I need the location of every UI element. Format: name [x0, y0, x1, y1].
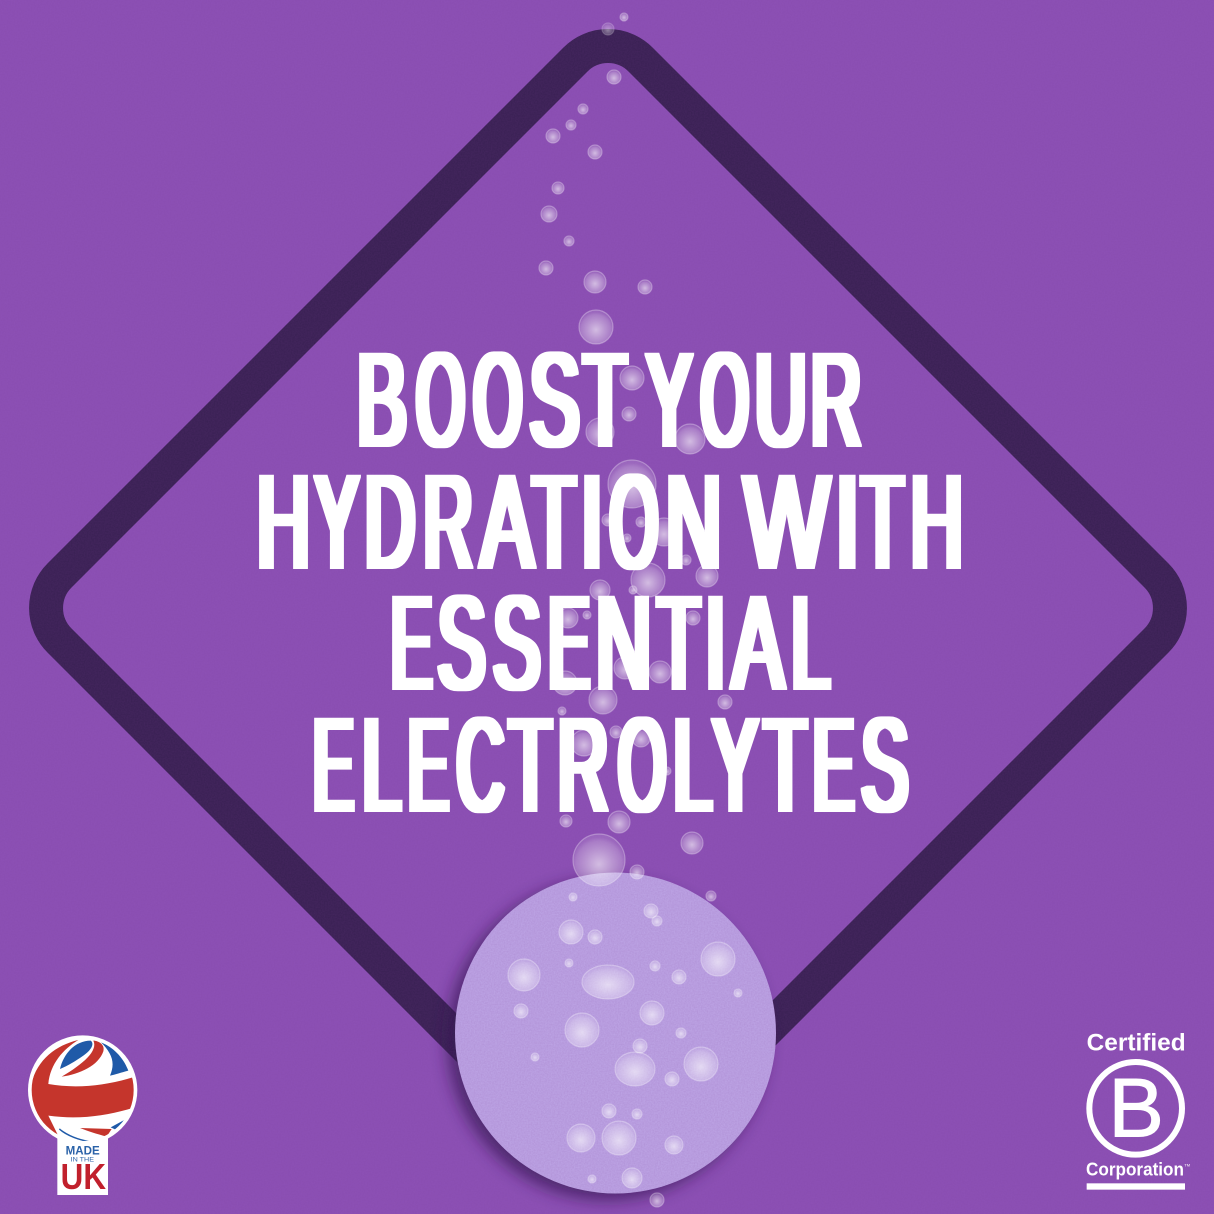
headline: S — [861, 691, 908, 840]
headline: L — [674, 691, 712, 840]
headline: S — [438, 569, 485, 718]
headline: T — [533, 448, 576, 597]
headline: T — [862, 448, 903, 597]
headline: T — [584, 326, 625, 475]
badge: certified B corporation: B — [1108, 1061, 1164, 1154]
headline: O — [618, 691, 666, 840]
badge: certified B corporation: Certified — [1087, 1030, 1186, 1057]
headline: Y — [647, 326, 692, 475]
headline: R — [811, 326, 861, 475]
headline: A — [481, 448, 533, 597]
badge: made in the UK: UK — [61, 1156, 106, 1197]
headline: U — [755, 326, 807, 475]
badge: made in the UK: MADE — [66, 1144, 100, 1158]
headline: C — [457, 691, 504, 840]
headline: O — [416, 326, 465, 475]
headline: E — [408, 691, 448, 840]
badge: certified B corporation: TM — [1184, 1163, 1190, 1168]
headline: E — [313, 691, 354, 840]
headline: S — [530, 326, 580, 475]
headline: E — [549, 569, 590, 718]
headline: D — [365, 448, 415, 597]
headline: Y — [713, 691, 758, 840]
headline: Y — [315, 448, 358, 597]
headline: H — [911, 448, 963, 597]
headline: O — [474, 326, 522, 475]
tablet shadow — [447, 880, 767, 1200]
headline: I — [835, 448, 860, 597]
headline: I — [581, 448, 603, 597]
headline: T — [509, 691, 551, 840]
headline: E — [391, 569, 432, 718]
headline: L — [792, 569, 830, 718]
headline: S — [493, 569, 540, 718]
headline: I — [706, 569, 725, 718]
headline: H — [257, 448, 310, 597]
headline: T — [764, 691, 806, 840]
headline: N — [666, 448, 721, 597]
badge: made in the UK — [28, 1035, 137, 1197]
headline — [257, 326, 963, 840]
headline: R — [558, 691, 608, 840]
headline: L — [362, 691, 401, 840]
badge: certified B corporation: Corporation — [1086, 1159, 1184, 1180]
badge: made in the UK: IN THE — [71, 1156, 95, 1163]
badge: certified B corporation — [1086, 1030, 1190, 1190]
headline: T — [658, 569, 700, 718]
headline: O — [610, 448, 658, 597]
headline: O — [701, 326, 748, 475]
headline: R — [424, 448, 473, 597]
headline: E — [813, 691, 854, 840]
bubbles rising from tablet — [508, 13, 742, 1207]
effervescent tablet — [455, 872, 776, 1194]
headline: N — [596, 569, 651, 718]
headline: W — [744, 448, 830, 597]
headline: B — [357, 326, 407, 475]
headline: A — [732, 569, 784, 718]
